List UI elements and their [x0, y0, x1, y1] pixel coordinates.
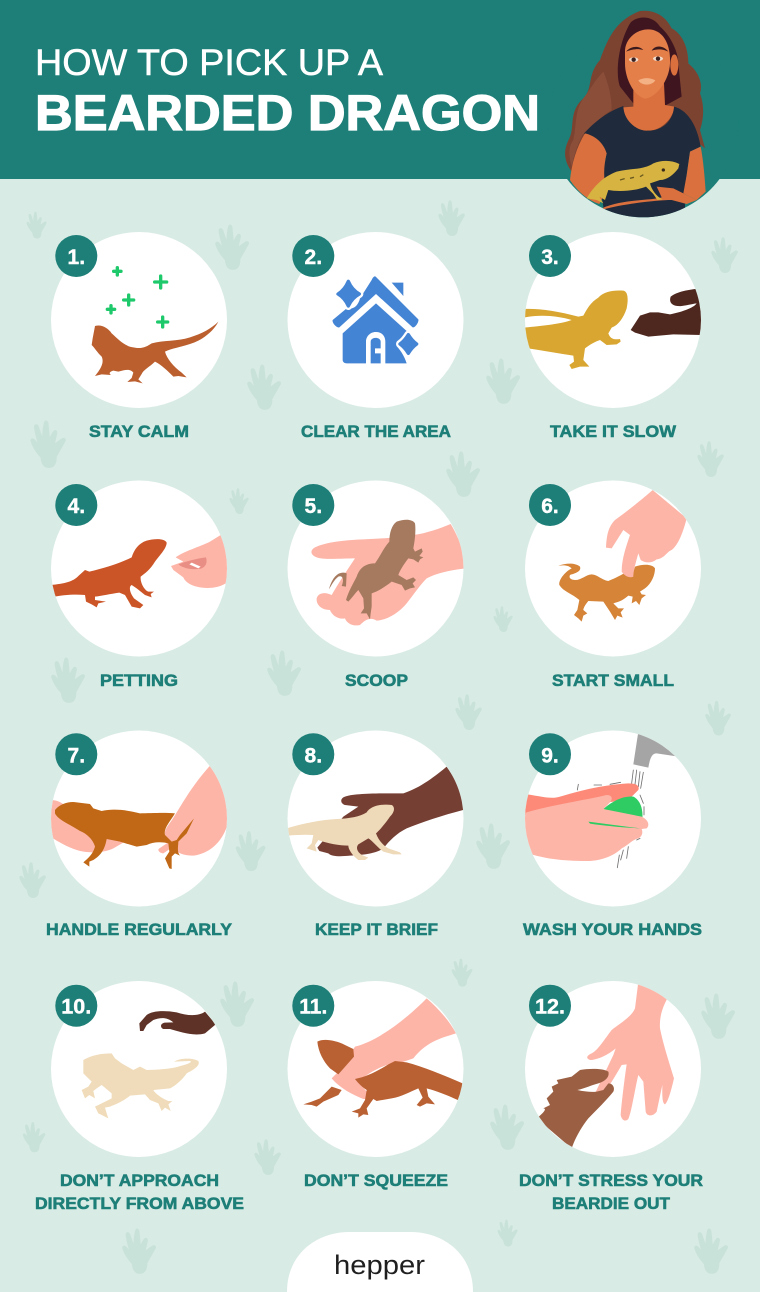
- number badge: 8.: [305, 744, 322, 767]
- panel: step 6 start small: [525, 480, 701, 690]
- label: DON’T APPROACH: [60, 1171, 219, 1190]
- hands under faucet with soap: [523, 732, 678, 868]
- header band: [0, 0, 760, 179]
- number badge: 6.: [541, 495, 559, 518]
- lizard with green sparkles: [92, 268, 218, 383]
- number badge: 3.: [541, 246, 559, 269]
- number badge: 7.: [68, 744, 85, 767]
- number badge: 1.: [68, 246, 85, 269]
- panel: step 11 don't squeeze: [288, 981, 465, 1190]
- number badge: 12.: [535, 996, 565, 1019]
- lizard and hand: [50, 535, 229, 608]
- number badge: [292, 733, 334, 775]
- label: BEARDIE OUT: [552, 1194, 671, 1213]
- panel: step 1 stay calm: [51, 232, 227, 441]
- label: SCOOP: [345, 671, 408, 690]
- hand and paw: [537, 982, 674, 1148]
- panel: step 8 keep it brief: [287, 730, 467, 939]
- panel: step 10 don't approach directly from above: [35, 981, 244, 1213]
- title: BEARDED DRAGON: [35, 85, 540, 141]
- number badge: 10.: [61, 996, 91, 1019]
- number badge: [292, 235, 334, 277]
- label: HANDLE REGULARLY: [46, 920, 233, 939]
- panel: step 5 scoop: [288, 480, 467, 690]
- label: START SMALL: [552, 671, 674, 690]
- finger touching lizard: [558, 490, 687, 622]
- illustration: woman holding a bearded dragon: [565, 10, 720, 218]
- number badge: 4.: [68, 495, 85, 518]
- label: TAKE IT SLOW: [550, 422, 677, 441]
- panel: step 4 petting: [50, 480, 229, 690]
- panel: step 12 don't stress your beardie out: [519, 981, 703, 1213]
- title: [35, 42, 540, 141]
- number badge: [55, 235, 97, 277]
- number badge: [529, 484, 571, 526]
- number badge: [55, 985, 97, 1027]
- number badge: [55, 484, 97, 526]
- label: DON’T STRESS YOUR: [519, 1171, 703, 1190]
- number badge: [529, 235, 571, 277]
- number badge: 2.: [305, 246, 322, 269]
- panel: step 7 handle regularly: [46, 730, 233, 939]
- number badge: [529, 985, 571, 1027]
- hand above pale lizard: [82, 1011, 216, 1118]
- lizard and hand: [523, 288, 703, 369]
- label: DIRECTLY FROM ABOVE: [35, 1194, 244, 1213]
- panel: step 2 clear the area: [288, 232, 464, 441]
- icon: clean house: [333, 276, 418, 363]
- footer logo tab: [287, 1232, 473, 1292]
- number badge: [529, 733, 571, 775]
- title: HOW TO PICK UP A: [35, 42, 383, 83]
- hand gripping lizard: [303, 998, 465, 1118]
- lizard scooped in hand: [311, 520, 467, 625]
- number badge: 5.: [305, 495, 322, 518]
- number badge: [292, 985, 334, 1027]
- logo: hepper wordmark: hepper: [334, 1250, 425, 1280]
- number badge: [292, 484, 334, 526]
- label: CLEAR THE AREA: [301, 422, 451, 441]
- label: [35, 1171, 244, 1213]
- number badge: 11.: [299, 996, 327, 1019]
- pale lizard on dark hand: [287, 767, 467, 860]
- label: STAY CALM: [89, 422, 189, 441]
- lizard held between hands: [50, 766, 229, 869]
- label: DON’T SQUEEZE: [304, 1171, 448, 1190]
- panel: step 9 wash your hands: [523, 730, 702, 939]
- panel: step 3 take it slow: [523, 232, 703, 441]
- label: [519, 1171, 703, 1213]
- label: WASH YOUR HANDS: [523, 920, 702, 939]
- number badge: 9.: [541, 744, 559, 767]
- label: KEEP IT BRIEF: [315, 920, 438, 939]
- number badge: [55, 733, 97, 775]
- label: PETTING: [100, 671, 178, 690]
